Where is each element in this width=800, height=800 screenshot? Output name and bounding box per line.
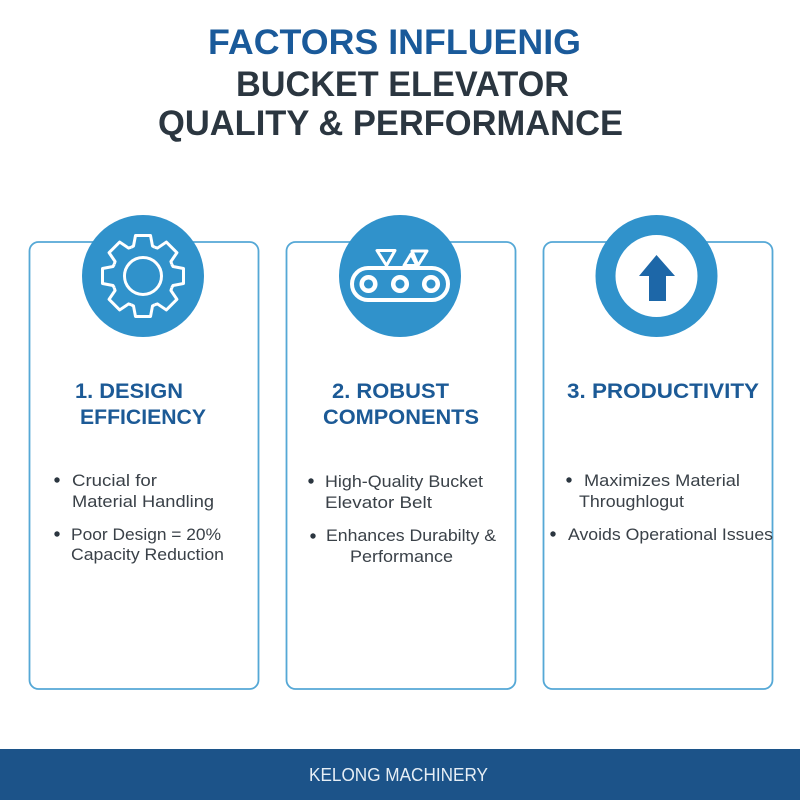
footer bar (0, 749, 800, 800)
text block: design efficiency bullets: Capacity Reduction (71, 545, 224, 564)
icon: gear (82, 215, 204, 337)
heading: robust components (323, 380, 479, 429)
title (158, 23, 623, 143)
heading: productivity: 3. PRODUCTIVITY (567, 380, 759, 403)
text block: productivity bullets: Maximizes Material (584, 471, 740, 490)
text block: design efficiency bullets: Material Handling (72, 492, 214, 511)
panel: robust components (286, 215, 516, 689)
text block: robust components bullets (308, 472, 497, 566)
text block: productivity bullets: Avoids Operational Issues (568, 525, 773, 544)
text block: productivity bullets (550, 471, 773, 544)
text block: design efficiency bullets: Crucial for (72, 471, 157, 490)
title: BUCKET ELEVATOR (236, 65, 569, 104)
title: FACTORS INFLUENIG (208, 23, 581, 62)
text block: robust components bullets: High-Quality Bucket (325, 472, 483, 491)
text block: productivity bullets: Throughlogut (579, 492, 684, 511)
text block: robust components bullets: Enhances Durabilty & (326, 526, 497, 545)
panel: design efficiency (30, 215, 258, 689)
text block: design efficiency bullets (54, 471, 224, 564)
heading: robust components: COMPONENTS (323, 406, 479, 429)
text block: robust components bullets: Elevator Belt (325, 493, 432, 512)
panel: productivity (544, 225, 773, 689)
title: QUALITY & PERFORMANCE (158, 104, 623, 143)
heading: design efficiency: EFFICIENCY (80, 406, 206, 429)
icon: up arrow (606, 225, 708, 327)
text block: design efficiency bullets: Poor Design = 20% (71, 525, 221, 544)
text block: robust components bullets: Performance (350, 547, 453, 566)
icon: conveyor (339, 215, 461, 337)
heading: design efficiency (75, 380, 206, 429)
heading: robust components: 2. ROBUST (332, 380, 449, 403)
footer bar: KELONG MACHINERY (309, 765, 488, 785)
heading: design efficiency: 1. DESIGN (75, 380, 183, 403)
